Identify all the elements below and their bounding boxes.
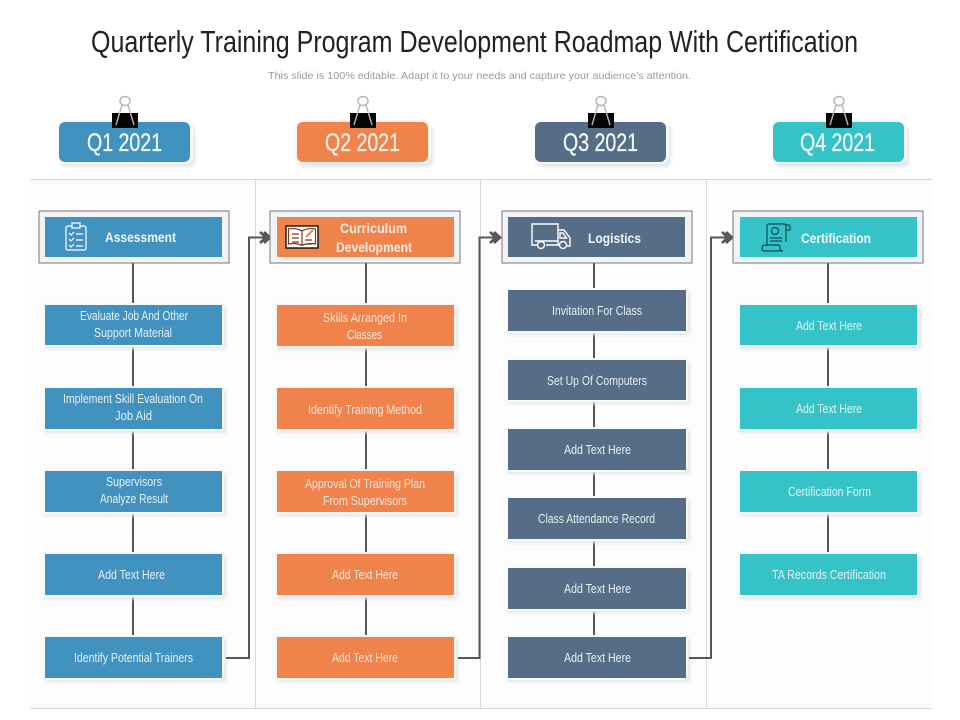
step: Class Attendance Record: Class Attendance Record <box>538 512 655 526</box>
step: Certification Form: Certification Form <box>788 485 871 499</box>
step: Add Text Here: Add Text Here <box>564 443 631 457</box>
step: Skills Arranged In Classes <box>275 303 458 350</box>
quarter label: Q2 2021 <box>295 120 433 167</box>
step: Add Text Here <box>506 566 690 613</box>
step: Set Up Of Computers <box>506 358 690 404</box>
column: Q1 <box>39 96 229 682</box>
arrow: Q2 to Q3 <box>458 232 500 658</box>
step: Implement Skill Evaluation On Job Aid: Job Aid <box>115 409 152 423</box>
step: Supervisors Analyze Result: Supervisors <box>106 475 162 489</box>
header: Certification: Certification <box>801 230 871 246</box>
step: Evaluate Job And Other Support Material <box>43 303 226 349</box>
step: Identify Potential Trainers: Identify Potential Trainers <box>74 651 193 665</box>
step: Evaluate Job And Other Support Material: Support Material <box>94 326 172 340</box>
quarter label: Q1 2021: Q1 2021 <box>87 129 162 157</box>
step: Identify Training Method: Identify Training Method <box>308 403 422 417</box>
step: Implement Skill Evaluation On Job Aid <box>43 386 226 433</box>
icon: binder clip Q4 <box>826 96 852 128</box>
icon: certificate scroll <box>762 224 790 251</box>
step: Approval Of Training Plan From Supervisors: Approval Of Training Plan <box>305 477 425 491</box>
step: Add Text Here <box>275 635 458 682</box>
step: Approval Of Training Plan From Supervisors: From Supervisors <box>323 494 407 508</box>
quarter label: Q1 2021 <box>57 120 195 167</box>
quarter label: Q2 2021: Q2 2021 <box>325 129 400 157</box>
quarter label: Q3 2021 <box>533 120 671 167</box>
header: Logistics <box>502 211 692 263</box>
connector line Q4 <box>827 263 829 556</box>
step: Add Text Here: Add Text Here <box>332 651 398 665</box>
subtitle: This slide is 100% editable. Adapt it to your needs and capture your audience's attention. <box>268 70 691 82</box>
icon: open book <box>286 226 318 248</box>
step: Add Text Here: Add Text Here <box>564 651 631 665</box>
step: Add Text Here: Add Text Here <box>796 402 862 416</box>
step: Add Text Here: Add Text Here <box>796 319 862 333</box>
step: Supervisors Analyze Result: Analyze Result <box>100 492 168 506</box>
column: Q2 <box>270 96 460 682</box>
step: Skills Arranged In Classes: Skills Arranged In <box>323 311 407 325</box>
icon: binder clip Q3 <box>588 96 614 128</box>
icon: binder clip Q1 <box>112 96 138 128</box>
step: Add Text Here: Add Text Here <box>332 568 398 582</box>
header: Curriculum Development: Development <box>336 239 412 255</box>
connector line Q2 <box>365 263 367 640</box>
header: Assessment <box>39 211 229 263</box>
header: Certification <box>733 211 923 263</box>
step: Add Text Here <box>738 303 921 349</box>
icon: clipboard checklist <box>66 223 86 250</box>
step: Invitation For Class <box>506 288 690 335</box>
column: Q4 <box>733 96 923 599</box>
quarter label: Q3 2021: Q3 2021 <box>563 129 638 157</box>
column: Q3 <box>502 96 692 682</box>
header: Assessment: Assessment <box>105 229 176 245</box>
step: Set Up Of Computers: Set Up Of Computers <box>547 374 647 388</box>
step: Add Text Here <box>275 552 458 599</box>
step: Evaluate Job And Other Support Material: Evaluate Job And Other <box>80 309 188 323</box>
step: Invitation For Class: Invitation For Class <box>552 304 642 318</box>
step: Add Text Here: Add Text Here <box>564 582 631 596</box>
step: TA Records Certification <box>738 552 921 599</box>
arrow: Q1 to Q2 <box>226 232 270 658</box>
step: Certification Form <box>738 469 921 516</box>
icon: delivery truck <box>532 224 570 248</box>
quarter label: Q4 2021 <box>771 120 909 167</box>
step: Add Text Here: Add Text Here <box>98 568 165 582</box>
step: TA Records Certification: TA Records Certification <box>772 568 886 582</box>
step: Identify Training Method <box>275 386 458 433</box>
header: Curriculum Development <box>270 211 460 263</box>
step: Supervisors Analyze Result <box>43 469 226 516</box>
step: Approval Of Training Plan From Supervisors <box>275 469 458 516</box>
background panel grid <box>30 180 932 708</box>
icon: binder clip Q2 <box>350 96 376 128</box>
quarter label: Q4 2021: Q4 2021 <box>800 129 875 157</box>
step: Add Text Here <box>506 635 690 682</box>
step: Add Text Here <box>738 386 921 433</box>
arrow: Q3 to Q4 <box>689 232 732 658</box>
step: Class Attendance Record <box>506 496 690 543</box>
header: Logistics: Logistics <box>588 230 641 246</box>
step: Add Text Here <box>43 552 226 599</box>
connector line Q3 <box>593 263 595 640</box>
step: Identify Potential Trainers <box>43 635 226 682</box>
connector line Q1 <box>132 263 134 640</box>
header: Curriculum Development: Curriculum <box>340 220 407 236</box>
step: Implement Skill Evaluation On Job Aid: Implement Skill Evaluation On <box>63 392 203 406</box>
step: Skills Arranged In Classes: Classes <box>347 328 382 342</box>
step: Add Text Here <box>506 427 690 474</box>
